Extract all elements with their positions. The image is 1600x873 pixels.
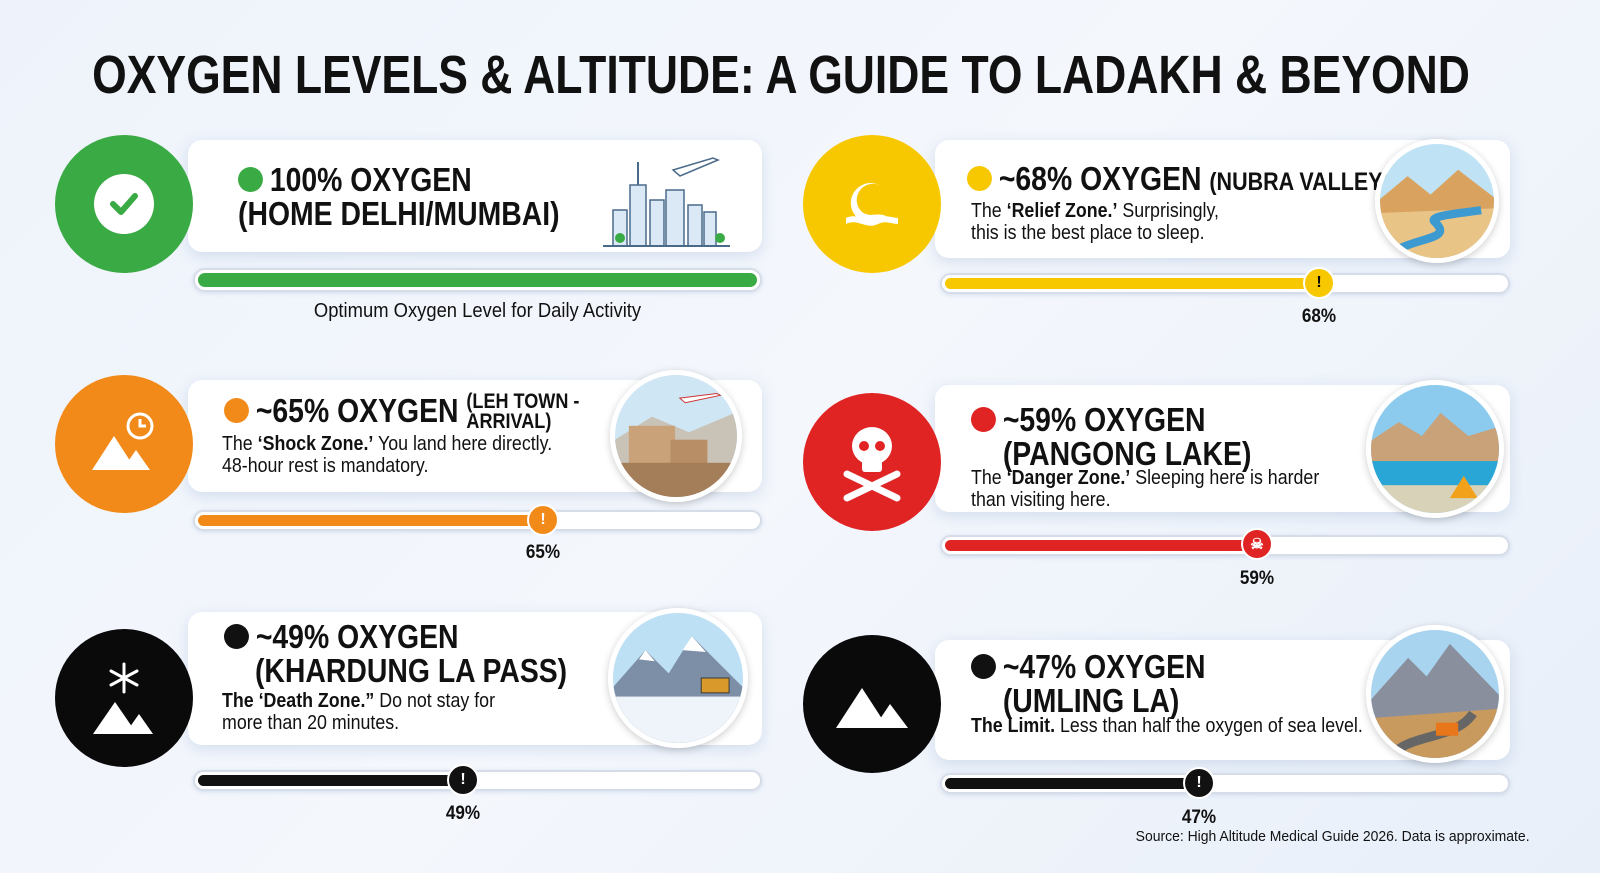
image: snowy pass — [608, 608, 748, 748]
marker: ☠ — [1250, 536, 1264, 553]
marker — [1183, 767, 1215, 799]
panel: delhi 100% — [55, 135, 766, 322]
label: 49% — [446, 803, 480, 824]
card — [935, 385, 1510, 512]
icon: black mountain — [803, 635, 941, 773]
card — [935, 140, 1510, 258]
panel: umling 47% — [803, 624, 1514, 828]
panel: leh 65% — [55, 368, 766, 563]
label: 65% — [526, 542, 560, 563]
heading — [971, 648, 1206, 719]
heading: (UMLING LA) — [1003, 682, 1179, 719]
icon: yellow wave — [803, 135, 941, 273]
icon: city — [603, 157, 730, 247]
marker: ! — [1196, 774, 1202, 791]
marker — [1241, 528, 1273, 560]
icon: snowflake mountain — [55, 629, 193, 767]
marker: ! — [540, 511, 546, 528]
heading: ~68% OXYGEN (NUBRA VALLEY) — [999, 160, 1390, 197]
description: this is the best place to sleep. — [971, 222, 1205, 244]
card — [188, 380, 762, 492]
description: The Limit. Less than half the oxygen of sea level. — [971, 715, 1363, 737]
description: The ‘Shock Zone.’ You land here directly. — [222, 433, 552, 455]
marker — [1303, 267, 1335, 299]
label: 68% — [1302, 306, 1336, 327]
bar 100% — [193, 268, 762, 292]
marker — [447, 764, 479, 796]
heading — [971, 401, 1251, 472]
image: valley — [1375, 139, 1499, 263]
description: 48-hour rest is mandatory. — [222, 455, 428, 477]
bar 68% — [940, 273, 1510, 294]
panel: khardung 49% — [55, 606, 766, 824]
heading: ~65% OXYGEN — [256, 392, 459, 429]
description — [971, 200, 1219, 244]
image: road jeep — [1366, 625, 1504, 763]
heading: ~59% OXYGEN — [1003, 401, 1206, 438]
title: OXYGEN LEVELS & ALTITUDE: A GUIDE TO LADAKH & BEYOND — [92, 45, 1470, 105]
source note: Source: High Altitude Medical Guide 2026. Data is approximate. — [1136, 828, 1530, 845]
bar 47% — [940, 773, 1510, 794]
image: leh — [610, 370, 742, 502]
marker: ! — [1316, 274, 1322, 291]
bar 65% — [193, 510, 762, 531]
icon: skull — [803, 393, 941, 531]
card — [188, 140, 762, 252]
heading: ~47% OXYGEN — [1003, 648, 1206, 685]
heading: (KHARDUNG LA PASS) — [255, 652, 567, 689]
marker: ! — [460, 771, 466, 788]
description: more than 20 minutes. — [222, 712, 399, 734]
marker — [527, 504, 559, 536]
description — [971, 467, 1319, 511]
bar 59% — [940, 535, 1510, 556]
heading — [224, 618, 567, 689]
image: lake — [1366, 380, 1504, 518]
description — [222, 690, 495, 734]
description — [222, 433, 552, 477]
heading: (PANGONG LAKE) — [1003, 435, 1251, 472]
card — [188, 612, 762, 745]
label: 59% — [1240, 568, 1274, 589]
heading — [224, 390, 579, 433]
heading: (LEH TOWN - — [466, 390, 579, 413]
description: than visiting here. — [971, 489, 1111, 511]
heading: ~49% OXYGEN — [256, 618, 459, 655]
caption: Optimum Oxygen Level for Daily Activity — [314, 300, 641, 322]
description: The ‘Death Zone.” Do not stay for — [222, 690, 495, 712]
description: The ‘Relief Zone.’ Surprisingly, — [971, 200, 1219, 222]
icon: green check — [55, 135, 193, 273]
icon: orange mountain clock — [55, 375, 193, 513]
heading: (HOME DELHI/MUMBAI) — [238, 195, 560, 232]
card — [935, 640, 1510, 760]
panel: pangong 59% — [803, 378, 1514, 589]
bar 49% — [193, 770, 762, 791]
heading: ARRIVAL) — [466, 410, 551, 433]
heading — [238, 161, 560, 232]
heading: 100% OXYGEN — [270, 161, 472, 198]
description: The ‘Danger Zone.’ Sleeping here is harder — [971, 467, 1319, 489]
label: 47% — [1182, 807, 1216, 828]
panel: nubra 68% — [803, 135, 1514, 327]
